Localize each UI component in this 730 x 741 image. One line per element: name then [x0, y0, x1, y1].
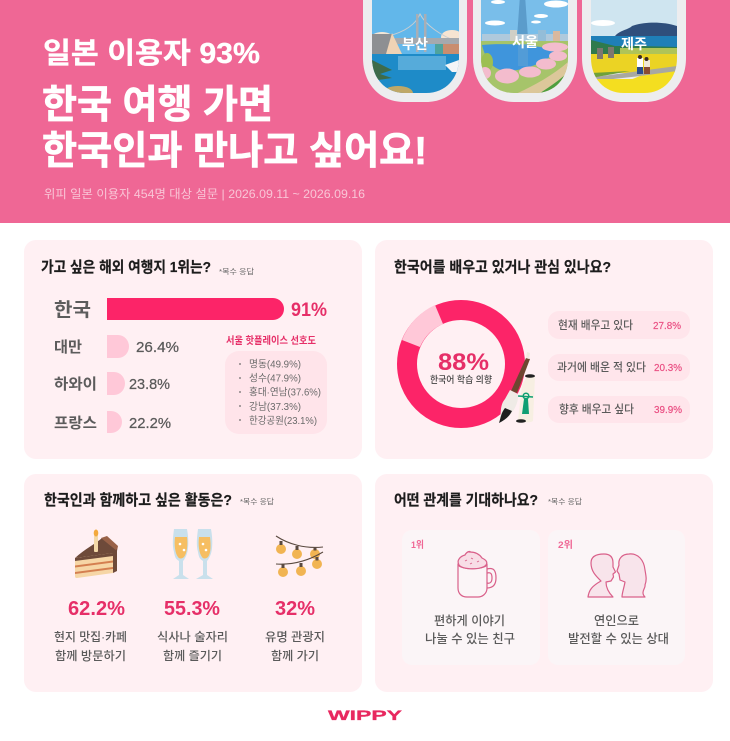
donut chart: 한국어 학습 의향: [430, 374, 492, 386]
stat: meals and drinks: 식사나 술자리: [157, 630, 228, 644]
bar: Hawaii: [54, 372, 170, 395]
bar: Korea: 91%: [291, 300, 327, 321]
bar: France: 22.2%: [129, 415, 171, 432]
logo: WIPPY: WIPPY: [328, 707, 403, 723]
header background: [0, 0, 730, 223]
stat: want to learn: 39.9%: [654, 404, 682, 416]
heading: 한국인과 함께하고 싶은 활동은?: [44, 492, 232, 509]
card: romantic partner: 발전할 수 있는 상대: [568, 631, 669, 646]
stat: currently learning: [548, 311, 690, 339]
Seoul hot places list: 한강공원(23.1%): [249, 415, 317, 427]
panel: travel destinations: [24, 240, 362, 459]
stat: meals and drinks: 55.3%: [164, 598, 220, 620]
donut chart: 88%: [438, 349, 489, 376]
heading: 어떤 관계를 기대하나요?: [394, 492, 538, 509]
window: Jeju: [582, 0, 686, 102]
survey note: 위피 일본 이용자 454명 대상 설문 | 2026.09.11 ~ 2026.09.16: [44, 187, 365, 201]
heading: 가고 싶은 해외 여행지 1위는?: [41, 259, 211, 276]
bar: Taiwan: 26.4%: [136, 339, 179, 356]
bar: Taiwan: 대만: [54, 339, 82, 356]
icon: mug: [458, 551, 496, 597]
Seoul hot places list: 홍대·연남(37.6%): [249, 386, 321, 398]
label: Seoul: 서울: [512, 34, 538, 50]
label: Busan: 부산: [402, 36, 428, 52]
stat: tourist spots: 유명 관광지: [265, 630, 325, 644]
Seoul hot places list: 성수(47.9%): [249, 372, 301, 384]
stat: currently learning: 27.8%: [653, 320, 681, 332]
card: romantic partner: [548, 530, 685, 665]
card: friend: 나눌 수 있는 친구: [425, 632, 515, 646]
icon: couple silhouettes: [588, 554, 646, 597]
note: *복수 응답: [219, 266, 254, 276]
Seoul hot places list: 명동(49.9%): [249, 358, 301, 370]
label: Jeju: 제주: [621, 36, 647, 52]
Seoul hot places list: 강남(37.3%): [249, 401, 301, 413]
icon: champagne glasses: [173, 529, 213, 579]
Seoul hot places heading: 서울 핫플레이스 선호도: [226, 334, 316, 347]
Seoul hot places list: [225, 351, 327, 434]
main title: 한국인과 만나고 싶어요!: [42, 130, 427, 173]
stat: food and cafe: [54, 598, 127, 663]
card: romantic partner: 연인으로: [594, 614, 639, 628]
bar: Korea: [54, 298, 327, 321]
main title: 한국 여행 가면: [42, 84, 273, 127]
stat: currently learning: 현재 배우고 있다: [558, 319, 633, 332]
stat: meals and drinks: [157, 598, 228, 663]
stat: food and cafe: 62.2%: [68, 598, 125, 620]
window: Busan: [363, 0, 467, 102]
bar: Taiwan: [54, 335, 179, 358]
stat: meals and drinks: 함께 즐기기: [163, 648, 222, 663]
window: Seoul: [473, 0, 577, 102]
bar: Korea: 한국: [54, 299, 91, 321]
card: romantic partner: 2위: [558, 539, 573, 551]
note: *복수 응답: [548, 496, 582, 506]
panel: relationships: [375, 474, 713, 692]
stat: want to learn: 향후 배우고 싶다: [559, 403, 634, 416]
card: friend: [402, 530, 540, 665]
bar: Hawaii: 하와이: [54, 376, 97, 393]
bar: Hawaii: 23.8%: [129, 376, 170, 393]
stat: food and cafe: 현지 맛집·카페: [54, 629, 127, 644]
main title: [42, 84, 427, 173]
stat: learned before: [548, 354, 690, 381]
stat: learned before: 과거에 배운 적 있다: [557, 361, 646, 374]
icon: brush and scroll: [499, 352, 535, 423]
stat: tourist spots: 함께 가기: [271, 648, 319, 663]
stat: learned before: 20.3%: [654, 362, 682, 374]
card: friend: 1위: [411, 539, 424, 551]
heading: 한국어를 배우고 있거나 관심 있나요?: [394, 259, 611, 276]
panel: learning Korean: [375, 240, 713, 459]
donut chart: [402, 305, 515, 418]
card: friend: 편하게 이야기: [434, 614, 505, 628]
icon: string lights: [276, 536, 323, 577]
bar: France: [54, 411, 171, 433]
header subtitle: 일본 이용자 93%: [43, 37, 260, 70]
stat: want to learn: [548, 396, 690, 423]
note: *복수 응답: [240, 496, 274, 506]
stat: tourist spots: [265, 598, 325, 663]
stat: food and cafe: 함께 방문하기: [55, 648, 126, 663]
icon: cake: [75, 530, 118, 578]
panel: activities: [24, 474, 362, 692]
stat: tourist spots: 32%: [275, 598, 315, 620]
bar: France: 프랑스: [54, 415, 97, 432]
